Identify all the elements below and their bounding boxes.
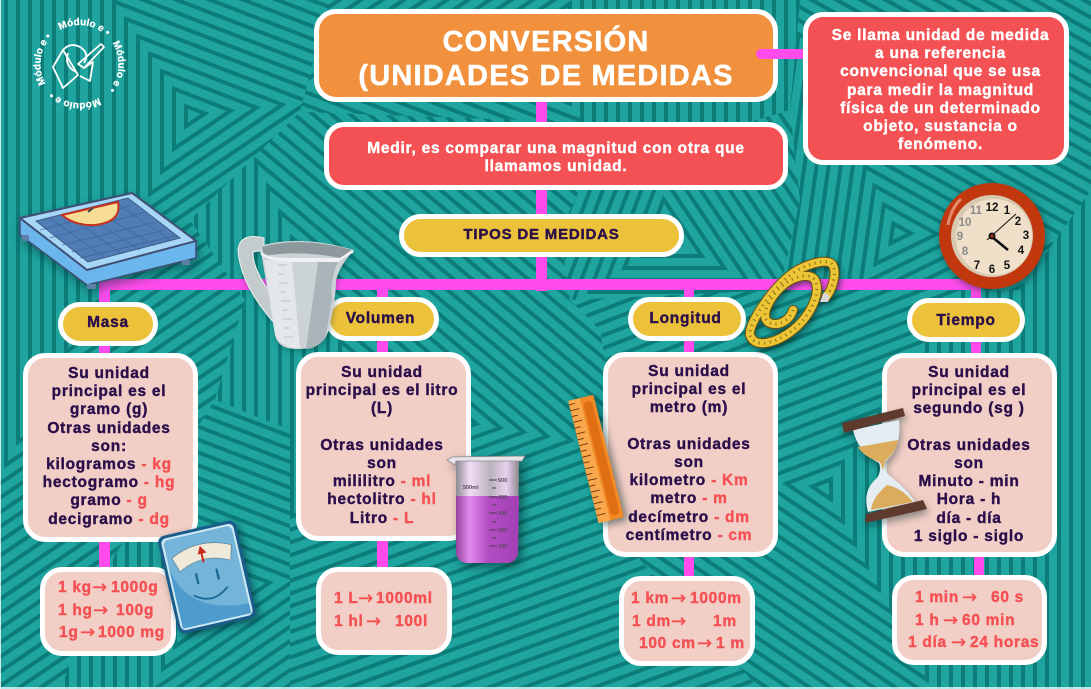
definition box: física de un determinado (840, 100, 1041, 117)
volumen pill (325, 297, 439, 341)
masa pill (58, 302, 158, 346)
longitud text: metro - m (650, 490, 728, 507)
longitud text: kilometro - Km (629, 472, 749, 489)
logo: Módulo e: Módulo e • (50, 94, 102, 110)
panel: masa (23, 302, 198, 656)
icon: weighing scale with smile (156, 520, 263, 640)
masa conversions: → (93, 600, 108, 621)
icon: clock: 3 (1023, 230, 1029, 242)
icon: platform scale (18, 192, 204, 298)
definition box: a una referencia (875, 45, 1006, 62)
icon: beaker: 200 (498, 528, 507, 534)
icon: clock: 12 (986, 202, 998, 214)
tiempo text: segundo (sg ) (913, 400, 1025, 417)
longitud conversions: 1m (713, 613, 737, 630)
longitud text (603, 352, 778, 557)
volumen text (296, 352, 471, 541)
title box: (UNIDADES DE MEDIDAS (358, 60, 734, 92)
masa pill: Masa (87, 314, 129, 331)
tiempo text: son (954, 455, 984, 472)
longitud conversions: 1000m (690, 590, 742, 607)
logo: Módulo e: Módulo e • (58, 18, 110, 34)
definition box: para medir la magnitud (847, 82, 1034, 99)
longitud conversions (619, 576, 755, 666)
tiempo pill: Tiempo (936, 312, 996, 329)
icon: clock: 7 (974, 260, 980, 272)
medir box (324, 122, 788, 190)
longitud conversions: → (697, 633, 712, 654)
icon: clock: 11 (970, 205, 983, 217)
icon: beaker: 300 (498, 511, 507, 517)
definition box: Se llama unidad de medida (832, 27, 1049, 44)
icon: hourglass (840, 408, 932, 530)
tiempo conversions: 1 min (915, 589, 959, 606)
panel: longitud (603, 297, 778, 666)
masa conversions: 1000g (111, 579, 158, 596)
icon: clock: 6 (989, 264, 995, 276)
icon: clock: 9 (957, 231, 963, 243)
definition box (803, 12, 1069, 165)
tiempo conversions: → (951, 632, 966, 653)
volumen text: Su unidad (341, 364, 423, 381)
icon: beaker: 500 (498, 478, 507, 484)
masa text: son: (91, 438, 127, 455)
definition box: fenómeno. (898, 136, 983, 153)
longitud conversions: 1 dm (632, 613, 671, 630)
longitud conversions: → (671, 588, 686, 609)
tiempo text: Minuto - min (918, 473, 1020, 490)
longitud text: decímetro - dm (628, 509, 750, 526)
volumen text: son (367, 455, 397, 472)
tiempo conversions: → (962, 587, 977, 608)
masa text: kilogramos - kg (46, 456, 172, 473)
longitud pill: Longitud (649, 310, 722, 327)
longitud text: metro (m) (650, 399, 728, 416)
icon: beaker: 500ml (463, 485, 479, 491)
icon: beaker: 100 (498, 544, 507, 550)
masa conversions: 1 kg (58, 579, 92, 596)
masa conversions: → (80, 622, 95, 643)
connector: title to definition (756, 49, 808, 59)
masa text: Otras unidades (47, 420, 171, 437)
icon: clock: 2 (1015, 216, 1021, 228)
icon: clock: 8 (962, 246, 969, 258)
icon: clock: 4 (1018, 245, 1025, 257)
tiempo text: Hora - h (937, 491, 1001, 508)
icon: clock: 5 (1004, 260, 1011, 272)
masa text (23, 353, 198, 542)
icon: beaker (446, 453, 532, 573)
logo: Módulo e: Módulo e • (110, 40, 126, 92)
volumen text: principal es el litro (306, 382, 458, 399)
volumen conversions: 1 hl (334, 613, 364, 630)
longitud conversions: 1 km (631, 590, 669, 607)
longitud conversions: → (671, 611, 686, 632)
masa text: hectogramo - hg (43, 474, 175, 491)
icon: beaker: 400 (498, 495, 507, 501)
volumen conversions (316, 567, 452, 655)
masa text: decigramo - dg (48, 511, 170, 528)
tiempo conversions: 1 h (915, 612, 940, 629)
longitud text: Otras unidades (627, 436, 751, 453)
tiempo text: Su unidad (928, 364, 1010, 381)
tiempo conversions (892, 575, 1047, 665)
longitud conversions: 100 cm (639, 635, 696, 652)
tiempo text: Otras unidades (907, 437, 1031, 454)
masa conversions: 1000 mg (98, 624, 165, 641)
longitud text: Su unidad (648, 363, 730, 380)
title box: CONVERSIÓN (442, 26, 649, 58)
panel: volumen (296, 297, 471, 655)
masa text: principal es el (52, 383, 166, 400)
icon: measuring tape (744, 256, 846, 356)
masa text: gramo - g (70, 492, 148, 509)
icon: clock: 10 (959, 217, 971, 229)
tipos de medidas pill (399, 214, 684, 257)
icon: clock (936, 182, 1052, 296)
tiempo conversions: 1 día (908, 634, 947, 651)
tiempo pill (907, 298, 1025, 342)
longitud conversions: 1 m (716, 635, 745, 652)
volumen conversions: → (358, 588, 373, 609)
volumen text: hectolitro - hl (327, 491, 437, 508)
tiempo text: principal es el (912, 382, 1026, 399)
icon: measuring jug (236, 236, 355, 355)
volumen text: Litro - L (350, 510, 414, 527)
longitud pill (628, 297, 746, 341)
tiempo text: 1 siglo - siglo (914, 528, 1024, 545)
tiempo text: día - día (936, 510, 1002, 527)
volumen conversions: 100l (395, 613, 428, 630)
definition box: objeto, sustancia o (863, 118, 1018, 135)
longitud text: centímetro - cm (626, 527, 752, 544)
icon: ruler (568, 395, 632, 530)
tiempo conversions: → (943, 610, 958, 631)
tiempo conversions: 60 min (962, 612, 1015, 629)
medir box: llamamos unidad. (485, 158, 627, 175)
logo: Módulo e: Módulo e • (33, 34, 50, 86)
masa conversions: 1g (59, 624, 78, 641)
masa conversions: 100g (116, 602, 154, 619)
longitud text: principal es el (632, 381, 746, 398)
definition box: convencional que se usa (840, 63, 1041, 80)
masa text: Su unidad (68, 365, 150, 382)
masa text: gramo (g) (70, 401, 148, 418)
tiempo text (882, 353, 1057, 557)
icon: clock: 1 (1004, 205, 1011, 217)
medir box: Medir, es comparar una magnitud con otra que (367, 140, 745, 157)
masa conversions: 1 hg (58, 602, 93, 619)
volumen conversions: → (366, 611, 381, 632)
tipos de medidas pill: TIPOS DE MEDIDAS (463, 226, 620, 243)
panel: tiempo (882, 298, 1057, 665)
masa conversions (40, 567, 176, 656)
tiempo conversions: 60 s (991, 589, 1024, 606)
title box (314, 9, 778, 102)
volumen text: Otras unidades (320, 437, 444, 454)
volumen text: (L) (371, 400, 393, 417)
logo: Módulo e (33, 18, 126, 110)
longitud text: son (674, 454, 704, 471)
masa conversions: → (92, 577, 107, 598)
volumen conversions: 1 L (334, 590, 358, 607)
volumen pill: Volumen (346, 310, 415, 327)
volumen conversions: 1000ml (376, 590, 433, 607)
tiempo conversions: 24 horas (970, 634, 1039, 651)
volumen text: mililitro - ml (333, 473, 431, 490)
